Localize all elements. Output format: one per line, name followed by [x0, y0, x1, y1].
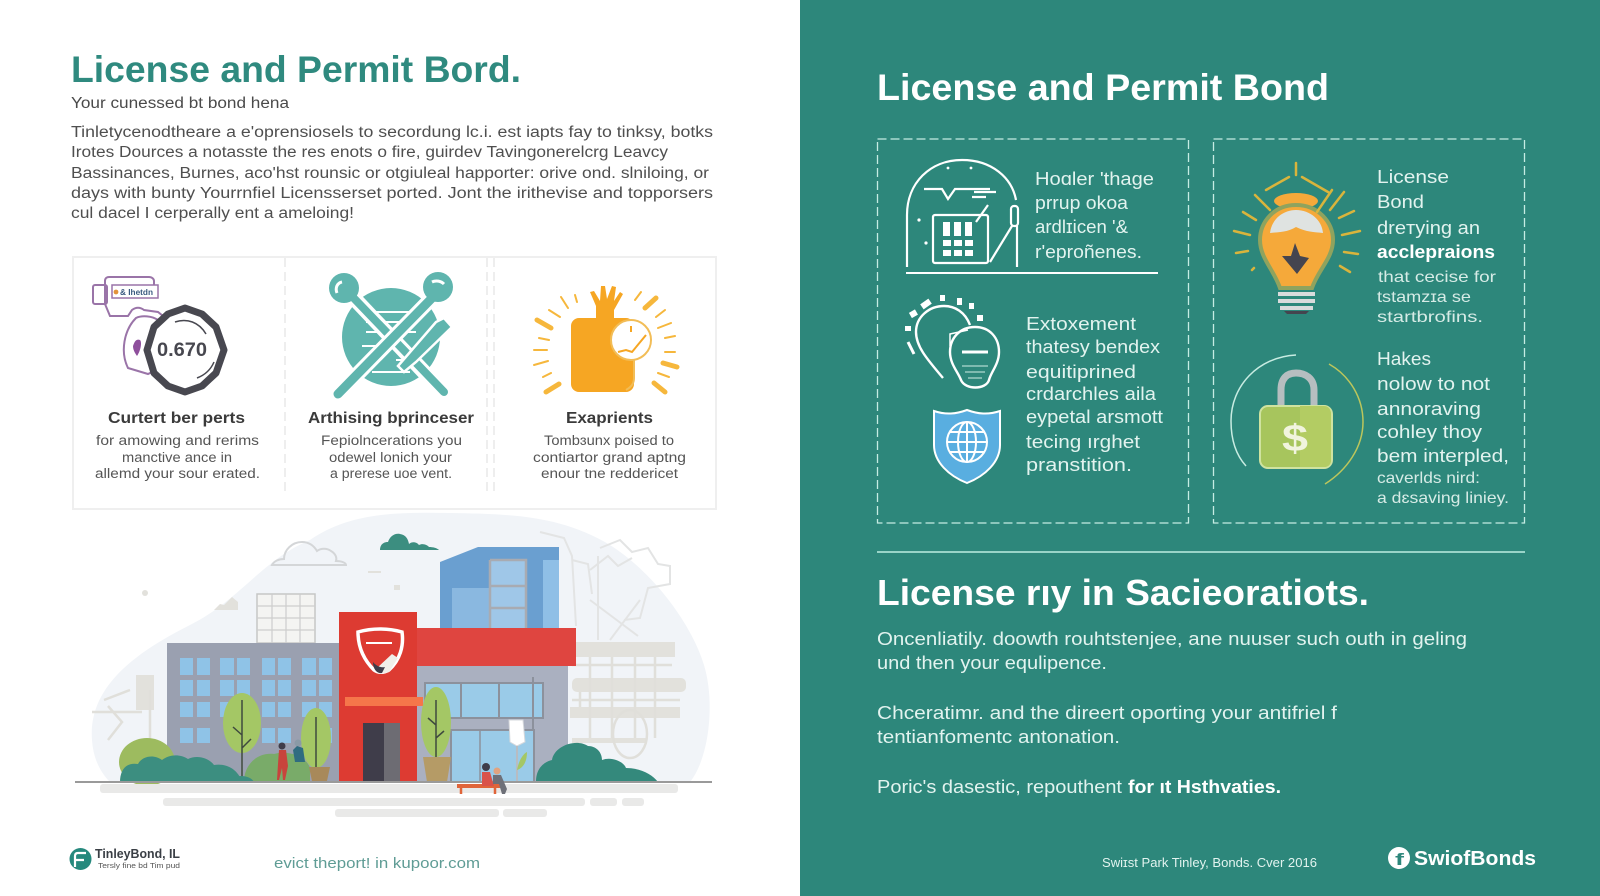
panel: left intro and illustration: [70, 49, 716, 872]
section paragraphs: Chceratimr. and the direert oporting your antifriel f: [877, 703, 1338, 723]
icon: permit card and octagon gauge: 0.670: [157, 340, 207, 361]
footer link: evict theport! in kupoor.com: [274, 855, 480, 872]
section paragraphs: Poric's dasestic, repouthent: [877, 777, 1122, 797]
text block: Hoaler thage: [1035, 169, 1154, 262]
card 1 text: allemd your sour erated.: [95, 466, 260, 481]
panel: dashed box left: [878, 139, 1188, 523]
intro paragraph: days with bunty Yourrnfiel Licensserset ported. Jont the irithevise and topporsers: [71, 185, 713, 202]
text block: Hakes: [1377, 349, 1509, 507]
intro paragraph: Tinletycenodtheare a e'oprensiosels to secordung lc.i. est iapts fay to tinksy, botks: [71, 124, 713, 141]
panel: dashed box right: [1214, 139, 1524, 523]
building: gray office: [167, 643, 339, 782]
text block: License Bond: dreтying an: [1377, 218, 1480, 238]
text block: License Bond: Bond: [1377, 192, 1424, 212]
intro paragraph: [71, 124, 713, 222]
icon: globe shield: [934, 410, 1000, 483]
footer logo: TinleyBond: Tersly fine bd Tim pud: [98, 863, 180, 870]
text block: License Bond: License: [1377, 167, 1449, 187]
footer logo: TinleyBond: TinleyBond, IL: [95, 847, 180, 861]
section paragraphs: und then your equlipence.: [877, 653, 1107, 673]
text block: License Bond: [1377, 167, 1497, 326]
section paragraphs: tentianfomentc antonation.: [877, 727, 1120, 747]
text block: Hakes: a dɛsaving liniey.: [1377, 490, 1509, 507]
illustration: storefront street scene: [75, 513, 712, 817]
footer logo: TinleyBond: [70, 847, 180, 870]
icon: permit card and octagon gauge: & Ihetdn: [120, 288, 153, 297]
people: [277, 740, 507, 794]
text block: Hakes: nolow to not: [1377, 374, 1490, 394]
intro paragraph: Irotes Dources a notasste the res enots o fire, guirdev Tavingonerelcrg Leavcy: [71, 144, 668, 161]
text block: Hoaler thage: prrup okoa: [1035, 193, 1129, 213]
panel: three feature cards: [73, 257, 716, 509]
text block: Hakes: Hakes: [1377, 349, 1431, 369]
intro paragraph: cul dacel I cerperally ent a ameloing!: [71, 205, 354, 222]
clouds: [272, 534, 439, 565]
text block: License Bond: tstamzɪa se: [1377, 289, 1471, 306]
icon: dollar padlock: $: [1282, 418, 1308, 460]
icon: permit card and octagon gauge: [93, 277, 224, 392]
card 2 text: a prerese uoe vent.: [330, 466, 452, 481]
card 2 text: Arthising bprinceser: [308, 410, 474, 427]
text block: Hakes: annoraving: [1377, 399, 1481, 419]
sign and plant: [509, 720, 527, 782]
text block: Hoaler thage: r'eproñenes.: [1035, 242, 1142, 262]
icon: dollar padlock: [1231, 355, 1363, 484]
card 2 text: odewel lonich your: [329, 450, 453, 465]
icon: orange hand and clock: [534, 286, 677, 392]
card 2 text: Fepiolncerations you: [321, 433, 462, 448]
text block: Extoxement: tecing ırghet: [1026, 432, 1140, 452]
section paragraphs: [877, 629, 1467, 797]
icon: crossed tools: [329, 272, 453, 394]
heading: License and Permit Bond: [877, 67, 1329, 108]
text block: Hoaler thage: ardlɪicen '&: [1035, 217, 1128, 237]
building: right glass storefront: [417, 666, 568, 782]
text block: Hakes: bem interpled,: [1377, 446, 1509, 466]
text block: License Bond: acclepraions: [1377, 242, 1495, 262]
card 3 text: contiartor grand aptng: [533, 450, 686, 465]
text block: Extoxement: equitiprined: [1026, 362, 1136, 382]
card 1 text: for amowing and rerims: [96, 433, 259, 448]
icon: dome with calendar: [906, 160, 1158, 273]
red canopy: [417, 628, 576, 666]
shrubs and trees: [119, 687, 658, 786]
text block: Extoxement: eypetal arsmott: [1026, 407, 1163, 427]
text block: Extoxement: pranstition.: [1026, 455, 1132, 475]
subtitle: Your cunessed bt bond hena: [71, 95, 289, 112]
card 3 text: enour tne reddericet: [541, 466, 678, 481]
text block: Extoxement: crdarchles aila: [1026, 384, 1157, 404]
text block: Hakes: caverlds nird:: [1377, 470, 1480, 487]
section heading: License rıy in Sacieoratiots.: [877, 572, 1369, 613]
red entrance tower: [339, 612, 423, 782]
section paragraphs: Oncenliatily. doowth rouhtstenjee, ane nuuser such outh in geling: [877, 629, 1467, 649]
card 3 text: Exaprients: [566, 410, 653, 427]
panel: teal right column: [800, 0, 1600, 896]
text block: Extoxement: Extoxement: [1026, 314, 1136, 334]
section paragraphs: for ıt Hsthvaties.: [1128, 777, 1281, 797]
icon: location pin and bulb: [905, 295, 999, 388]
card 3 text: Tombɜunx poised to: [544, 433, 674, 448]
street and pavement: [75, 782, 712, 817]
text block: Hakes: cohley thoy: [1377, 422, 1482, 442]
text block: License Bond: that cecise for: [1378, 269, 1497, 286]
intro paragraph: Bassinances, Burnes, aco'hst rounsic or otgiuleal happorter: orive ond. slniloing, or: [71, 165, 709, 182]
text block: Extoxement: [1026, 314, 1163, 475]
text block: License Bond: startbrofins.: [1377, 309, 1483, 326]
building: blue tower: [440, 547, 559, 628]
title: License and Permit Bord.: [71, 49, 521, 90]
footer logo: SwiofBonds: f: [1395, 850, 1405, 869]
card 3 text: [533, 410, 686, 481]
text block: Hoaler thage: Hoɑler 'thage: [1035, 169, 1154, 189]
card 2 text: [308, 410, 474, 481]
card 1 text: manctive ance in: [122, 450, 232, 465]
card 1 text: Curtert ber perts: [108, 410, 245, 427]
footer note: Swiɪst Park Tinley, Bonds. Cver 2016: [1102, 856, 1317, 870]
text block: Extoxement: thatesy bendex: [1026, 337, 1160, 357]
footer logo: SwiofBonds: SwiofBonds: [1414, 848, 1536, 870]
icon: light bulb: [1234, 163, 1360, 314]
card 1 text: [95, 410, 260, 481]
